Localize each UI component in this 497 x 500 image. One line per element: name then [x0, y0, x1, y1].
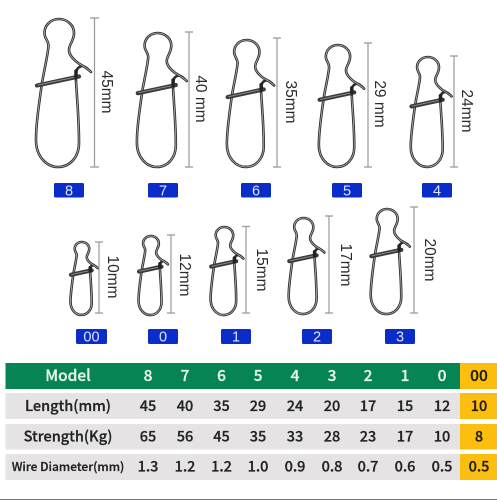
dimension: 45mm: [90, 18, 115, 167]
table row: strength: Strength(Kg): [24, 426, 112, 446]
badge: 1: 1: [232, 330, 240, 346]
table header row: 7: [181, 364, 190, 386]
table row: strength: 23: [360, 426, 376, 446]
table header row: Model: [45, 364, 91, 386]
size group: model 3: [371, 207, 438, 346]
table row: length: 17: [360, 395, 376, 416]
size group: model 0: [139, 235, 193, 346]
table row: wire diameter: Wire Diameter(mm): [12, 458, 124, 475]
icon: snap 7: [137, 33, 187, 167]
table row: wire diameter: 1.0: [248, 456, 268, 476]
dimension: 40 mm: [185, 32, 209, 167]
dimension: 29 mm: 29 mm: [371, 80, 388, 128]
table row: strength: 33: [287, 426, 303, 446]
dimension: 10mm: 10mm: [104, 255, 121, 299]
table row: length: 35: [213, 395, 230, 416]
size group: model 4: [411, 56, 475, 200]
icon: snap 1: [211, 227, 243, 315]
table row: length: 15: [397, 395, 413, 416]
table row: strength: 45: [213, 426, 230, 446]
dimension: 20mm: 20mm: [421, 238, 438, 282]
table row: length: 20: [324, 395, 340, 416]
badge: 5: [332, 183, 362, 200]
badge: 6: [241, 183, 271, 200]
table row: strength: 65: [140, 426, 156, 446]
table row: wire diameter: [6, 454, 497, 480]
badge: 7: [148, 183, 178, 200]
dimension: 24mm: 24mm: [458, 89, 475, 133]
badge: 3: 3: [396, 330, 404, 346]
table row: wire diameter: 0.6: [395, 456, 415, 476]
icon: snap 3: [371, 209, 410, 314]
table row: strength: [6, 424, 497, 450]
table header row: 2: [364, 364, 373, 386]
table row: wire diameter: 0.9: [285, 456, 305, 476]
size group: model 2: [289, 216, 354, 346]
table row: wire diameter: 1.3: [138, 456, 158, 476]
table row: length: 45: [140, 395, 156, 416]
badge: 6: 6: [252, 184, 260, 200]
table row: length: Length(mm): [25, 395, 111, 416]
table header row: [6, 363, 497, 389]
badge: 4: [422, 183, 452, 200]
dimension: 29 mm: [364, 43, 388, 167]
dimension: 40 mm: 40 mm: [192, 75, 209, 123]
table header row: 4: [291, 364, 300, 386]
table header row: 00: [470, 364, 488, 386]
badge: 2: 2: [313, 330, 321, 346]
dimension: 15mm: 15mm: [253, 248, 270, 292]
specification table: [6, 363, 497, 480]
dimension: 17mm: 17mm: [337, 243, 354, 287]
badge: 7: 7: [159, 184, 167, 200]
table header row: 8: [144, 364, 153, 386]
size group: model 00: [70, 242, 121, 346]
badge: 5: 5: [343, 184, 351, 200]
table row: strength: 28: [324, 426, 340, 446]
table row: length: 12: [434, 395, 450, 416]
dimension: 24mm: [450, 56, 475, 167]
badge: 8: 8: [65, 184, 73, 200]
table row: length: 24: [287, 395, 303, 416]
table row: strength: 8: [475, 426, 483, 446]
table row: strength: 35: [250, 426, 266, 446]
size group: model 7: [137, 32, 209, 200]
size group: model 8: [36, 18, 115, 200]
icon: snap 8: [36, 19, 91, 167]
icon: snap 2: [289, 218, 324, 314]
dimension: 35mm: 35mm: [282, 80, 299, 124]
table row: length: 10: [471, 395, 487, 416]
icon: snap 4: [411, 57, 452, 167]
size group: model 1: [211, 226, 270, 346]
table header row: 6: [217, 364, 226, 386]
dimension: 45mm: 45mm: [98, 70, 115, 114]
icon: snap 6: [227, 40, 274, 167]
table row: length: 40: [177, 395, 193, 416]
table header row: 0: [438, 364, 447, 386]
badge: 0: 0: [159, 330, 167, 346]
table row: wire diameter: 0.8: [322, 456, 342, 476]
table row: wire diameter: 1.2: [211, 456, 232, 476]
table row: strength: 56: [177, 426, 193, 446]
table row: wire diameter: 0.5: [469, 456, 489, 476]
table row: strength: 17: [397, 426, 413, 446]
badge: 4: 4: [433, 184, 441, 200]
table header row: 5: [254, 364, 262, 386]
dimension: 35mm: [273, 38, 299, 167]
dimension: 12mm: 12mm: [176, 253, 193, 297]
icon: snap 5: [319, 45, 364, 167]
table header row: 3: [328, 364, 336, 386]
icon: snap 0: [139, 236, 168, 315]
table header row: 1: [401, 364, 409, 386]
size group: model 5: [319, 43, 388, 200]
table row: wire diameter: 0.7: [358, 456, 378, 476]
table row: length: 29: [250, 395, 266, 416]
size group: model 6: [227, 38, 299, 200]
icon: snap 00: [70, 242, 98, 315]
table row: wire diameter: 1.2: [175, 456, 195, 476]
badge: 00: 00: [83, 330, 100, 346]
table row: length: [6, 393, 497, 419]
badge: 8: [54, 183, 84, 200]
table row: strength: 10: [434, 426, 450, 446]
table row: wire diameter: 0.5: [432, 456, 452, 476]
